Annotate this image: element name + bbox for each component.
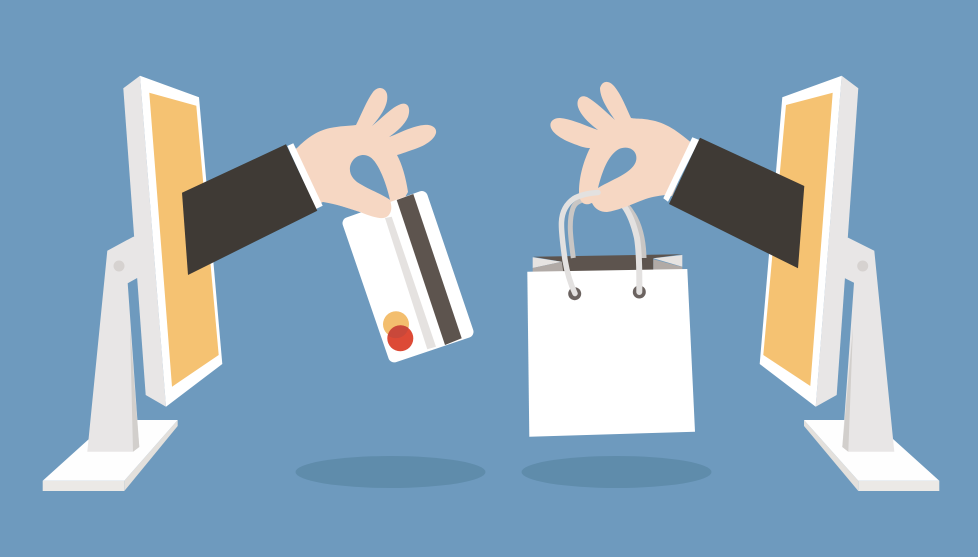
card logo: red circle (387, 325, 413, 351)
left monitor base (43, 420, 178, 491)
right monitor base (804, 420, 939, 491)
ground shadow: bag (522, 456, 712, 488)
bag left eyelet (568, 287, 581, 300)
bag front (527, 269, 695, 437)
card signature strip (385, 217, 436, 349)
bag left handle (561, 192, 598, 294)
bag right handle shade (626, 205, 644, 258)
left monitor frame (140, 76, 222, 407)
right monitor frame (760, 76, 842, 407)
left sleeve cuff (287, 143, 323, 209)
bag right handle (624, 206, 639, 292)
bag right flap (653, 255, 682, 267)
card logo: overlap (388, 325, 408, 338)
right sleeve cuff (663, 137, 699, 202)
right monitor stand (835, 236, 894, 452)
card logo: yellow circle (383, 311, 409, 337)
bag left flap (533, 257, 562, 268)
left monitor stand (87, 236, 146, 452)
right sleeve (669, 138, 804, 268)
right monitor side panel (816, 76, 858, 407)
credit card (348, 194, 468, 356)
left monitor screen (149, 93, 219, 387)
right monitor screen (763, 93, 833, 386)
card body (348, 197, 468, 356)
left monitor (43, 76, 222, 491)
bag right eyelet (633, 286, 646, 298)
left monitor side panel (123, 76, 166, 407)
ground shadow: card (296, 456, 486, 488)
bag right flap shade (653, 259, 682, 270)
card magnetic stripe (397, 194, 462, 345)
bag left flap shade (533, 262, 563, 272)
left hand thumb (335, 172, 391, 218)
bag back handle (570, 200, 583, 258)
right monitor (760, 76, 939, 491)
left sleeve (182, 144, 317, 275)
bag back inner (533, 254, 682, 272)
shopping bag (527, 200, 695, 437)
left hand fingers (290, 88, 436, 215)
right hand (550, 82, 694, 212)
